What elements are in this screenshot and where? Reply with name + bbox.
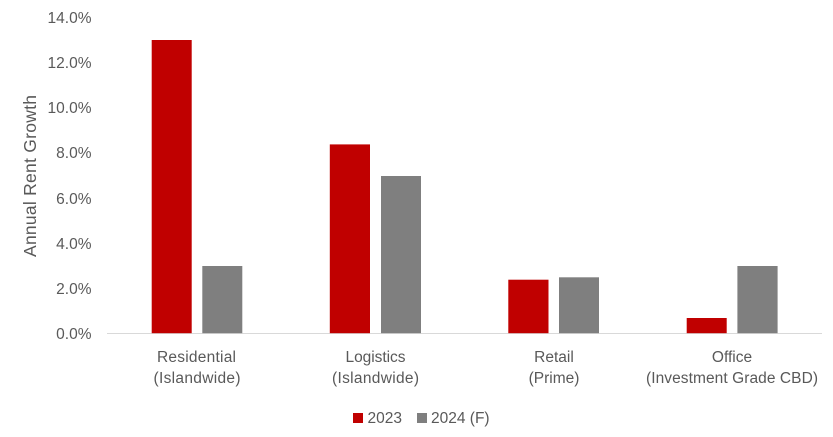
bars: Logistics (330, 144, 421, 333)
legend: 2024 (F) (431, 410, 490, 427)
category labels: Logistics (346, 349, 406, 366)
legend (353, 410, 490, 427)
bars: Retail (508, 277, 599, 333)
y axis tick labels: 14.0% (48, 10, 92, 27)
y axis tick labels: 10.0% (48, 100, 92, 117)
y axis tick labels: 12.0% (48, 55, 92, 72)
category labels: (Islandwide) (332, 370, 419, 387)
y axis title: Annual Rent Growth (20, 95, 40, 257)
y axis tick labels (48, 10, 92, 343)
category labels: (Prime) (529, 370, 579, 387)
y axis tick labels: 8.0% (56, 145, 92, 162)
category labels: Office (712, 349, 752, 366)
category labels: Residential (157, 349, 236, 366)
legend: 2023 (368, 410, 402, 427)
bars: Residential (152, 40, 242, 333)
category labels (154, 349, 818, 387)
y axis tick labels: 4.0% (56, 236, 92, 253)
category labels: (Islandwide) (154, 370, 240, 387)
y axis tick labels: 0.0% (56, 326, 92, 343)
y axis tick labels: 6.0% (56, 191, 92, 208)
bars: Office (687, 266, 778, 333)
category labels: (Investment Grade CBD) (646, 370, 818, 387)
y axis tick labels: 2.0% (56, 281, 92, 298)
category labels: Retail (534, 349, 574, 366)
